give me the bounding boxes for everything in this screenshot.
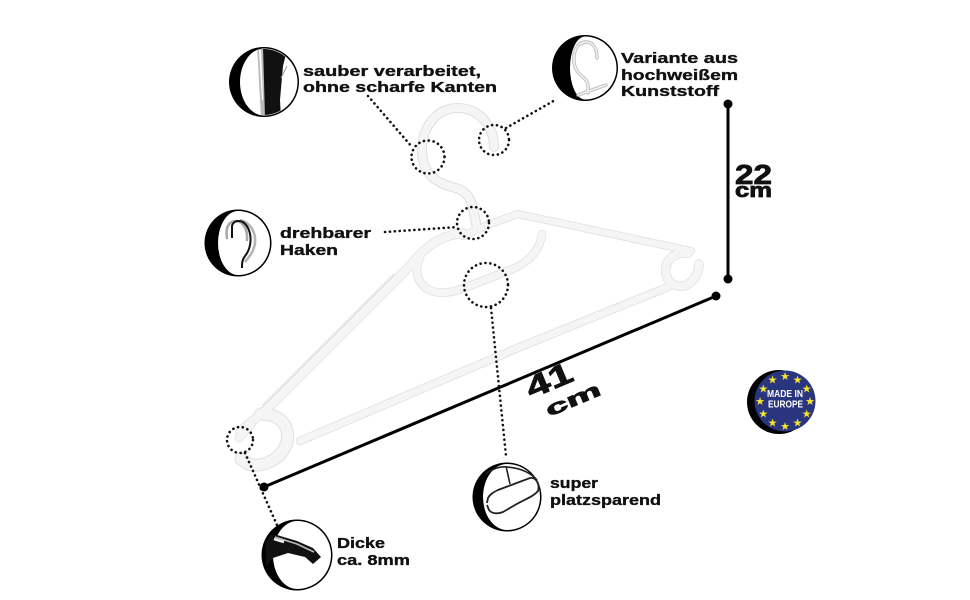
hanger: shadow outline bbox=[239, 108, 699, 465]
text: white plastic variant: Variante aus bbox=[621, 50, 738, 67]
badge: white plastic hook bbox=[552, 35, 618, 101]
EU stars: ★ bbox=[780, 420, 790, 433]
EU stars bbox=[755, 370, 815, 433]
EU stars: ★ bbox=[758, 408, 768, 420]
infographic canvas bbox=[204, 35, 816, 590]
dimension: height 22 cm bbox=[724, 100, 772, 284]
EU stars: ★ bbox=[793, 373, 803, 386]
EU stars: ★ bbox=[780, 370, 790, 383]
hanger: body bbox=[239, 108, 699, 465]
text: swivel hook bbox=[280, 225, 371, 259]
badge: thickness bbox=[262, 520, 332, 590]
text: swivel hook: Haken bbox=[280, 242, 338, 259]
text: white plastic variant bbox=[621, 50, 738, 100]
text: white plastic variant: hochweißem bbox=[621, 67, 738, 84]
dotted leader lines bbox=[245, 96, 557, 525]
text: space saving bbox=[550, 475, 661, 509]
badge: finish detail bbox=[229, 46, 299, 118]
badge: space saving bbox=[472, 462, 542, 532]
text: white plastic variant: Kunststoff bbox=[621, 83, 720, 100]
badge: made in Europe bbox=[747, 370, 816, 434]
EU stars: ★ bbox=[802, 382, 812, 396]
text: thickness: Dicke bbox=[337, 535, 385, 552]
badge text: EUROPE bbox=[768, 398, 803, 410]
text: finish: ohne scharfe Kanten bbox=[303, 79, 497, 96]
EU stars: ★ bbox=[758, 382, 768, 396]
EU stars: ★ bbox=[768, 373, 778, 386]
text: space saving: platzsparend bbox=[550, 492, 661, 509]
badge: swivel hook bbox=[204, 210, 272, 276]
EU stars: ★ bbox=[805, 395, 815, 408]
text: thickness: ca. 8mm bbox=[337, 552, 410, 569]
EU stars: ★ bbox=[768, 417, 778, 430]
dimension: width 41 cm bbox=[260, 292, 720, 492]
dimension: width 41 cm: 41 bbox=[521, 356, 578, 405]
text: swivel hook: drehbarer bbox=[280, 225, 371, 242]
text: thickness bbox=[337, 535, 410, 569]
hanger bbox=[239, 108, 699, 465]
text: finish: sauber verarbeitet, bbox=[303, 63, 481, 80]
EU stars: ★ bbox=[793, 417, 803, 430]
hanger: ridged shoulder bbox=[263, 274, 394, 405]
dimension: height 22 cm: cm bbox=[735, 180, 772, 202]
EU stars: ★ bbox=[802, 408, 812, 420]
EU stars: ★ bbox=[755, 395, 765, 408]
dotted callout circles bbox=[227, 125, 509, 453]
badge text bbox=[767, 388, 803, 410]
dimension: width 41 cm: cm bbox=[542, 379, 604, 422]
badge text: MADE IN bbox=[767, 388, 803, 400]
dimension: height 22 cm: 22 bbox=[735, 159, 772, 190]
text: space saving: super bbox=[550, 475, 598, 492]
text: finish bbox=[303, 63, 497, 96]
